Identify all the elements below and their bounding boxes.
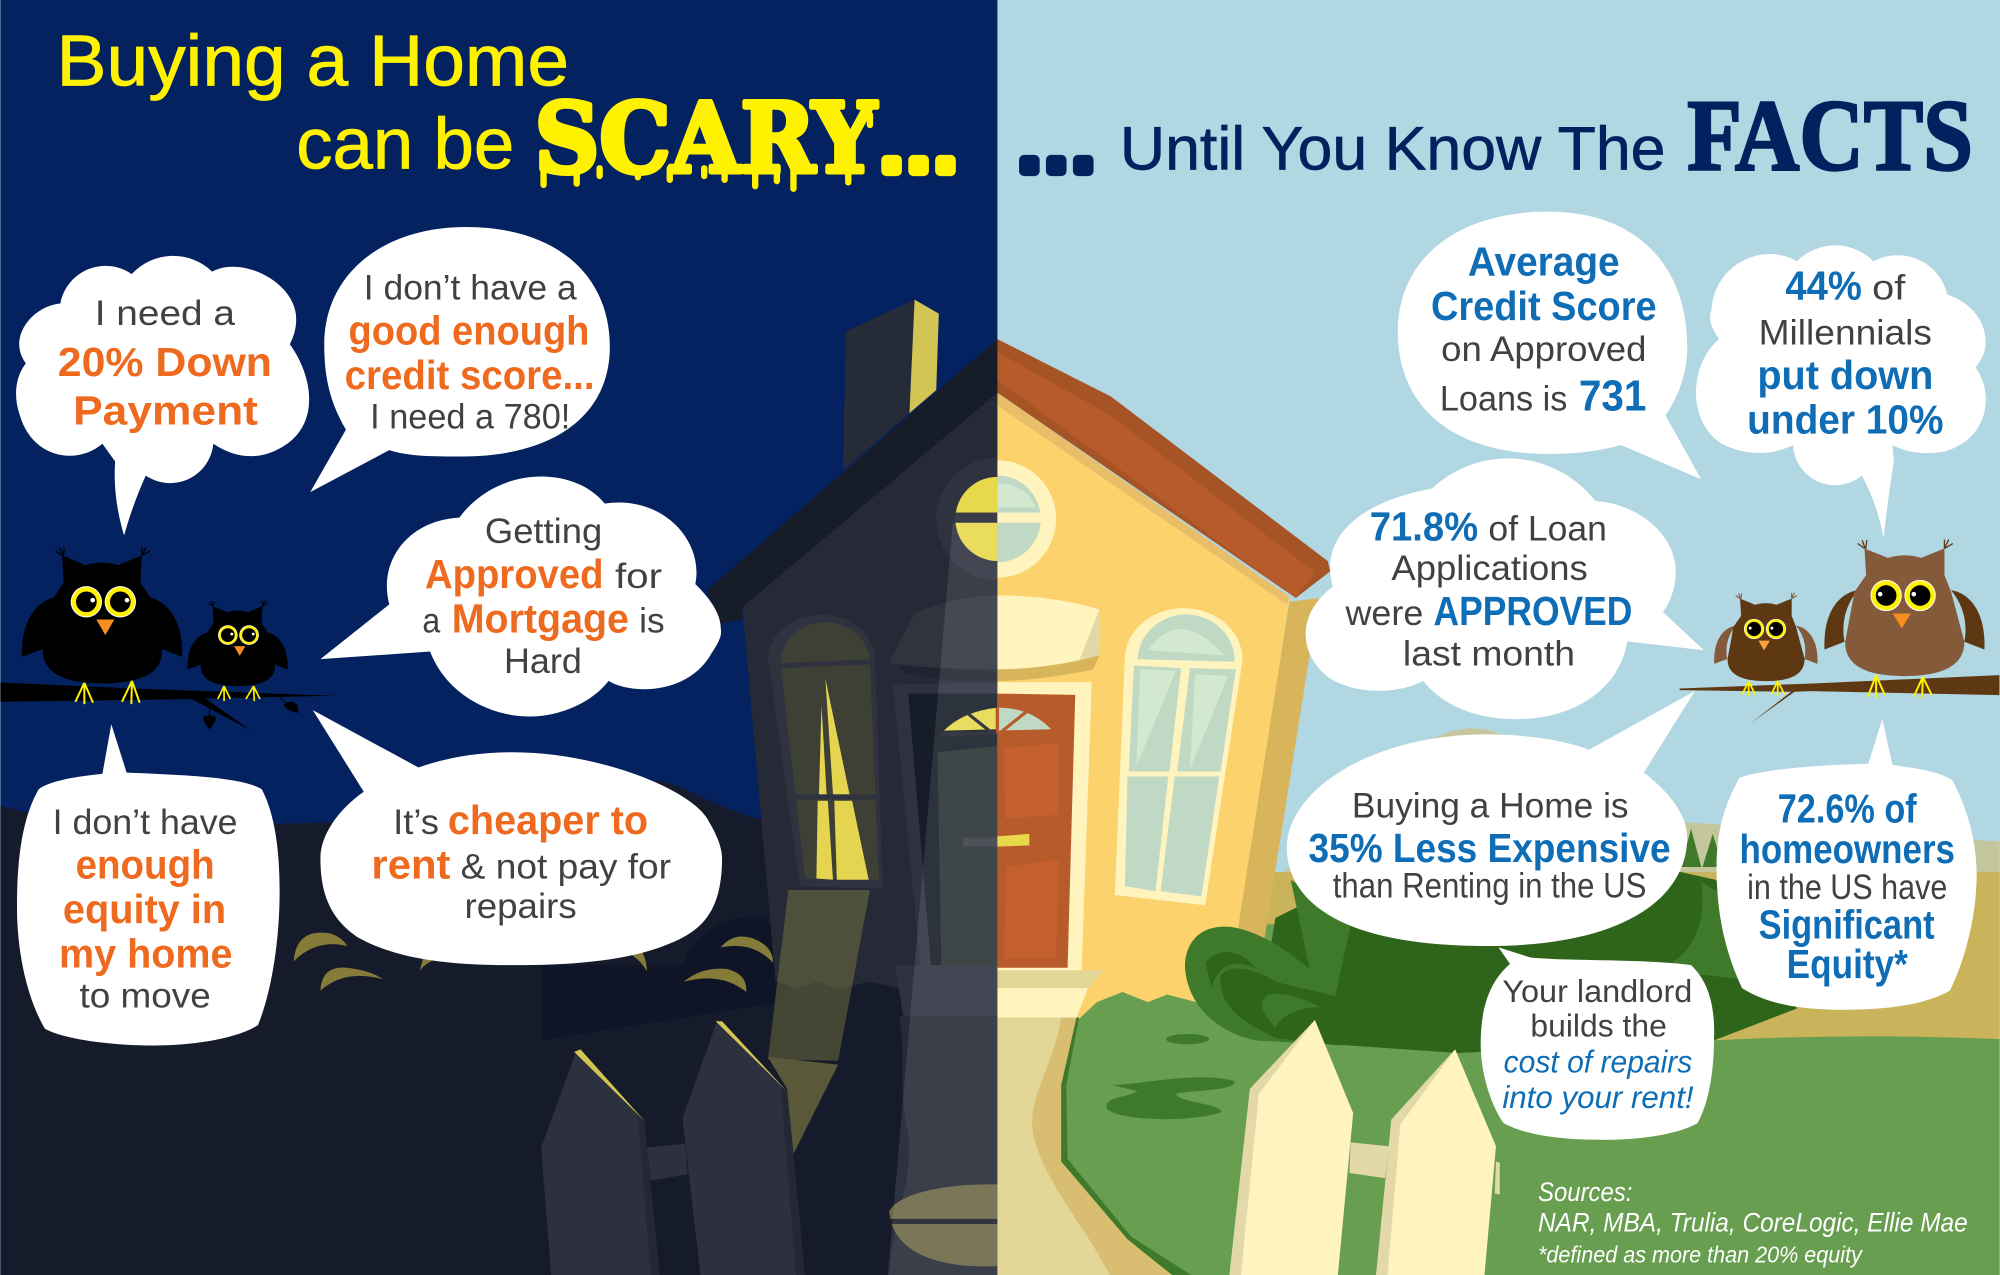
awning dark	[889, 595, 997, 682]
small black owl	[188, 601, 288, 701]
text: 731	[1579, 373, 1646, 421]
text: I don’t have a	[364, 269, 577, 308]
text	[53, 803, 238, 1015]
text: on Approved	[1441, 330, 1646, 369]
bubble: credit score	[310, 227, 610, 492]
bubble: cheaper to rent	[313, 710, 722, 965]
title right: Until You Know The	[1120, 115, 1666, 183]
text	[1345, 504, 1632, 674]
small brown owl	[1714, 593, 1818, 696]
text: of Loan	[1488, 510, 1607, 549]
bubble: landlord repairs	[1481, 947, 1714, 1140]
awning	[997, 595, 1099, 681]
text: homeowners	[1740, 826, 1955, 872]
text: 20% Down	[58, 339, 272, 385]
text: Mortgage	[452, 595, 629, 641]
bubble: less expensive	[1287, 691, 1695, 946]
door step	[997, 970, 1105, 1017]
bubble: 44% of millennials	[1696, 245, 1986, 538]
sources: Sources:	[1538, 1177, 1632, 1207]
title left: Buying a Home	[57, 20, 569, 101]
text	[1309, 786, 1671, 906]
title right: ...	[1019, 104, 1100, 187]
text: a	[422, 601, 441, 640]
big black owl	[22, 547, 182, 704]
title left	[56, 20, 962, 195]
night ground	[0, 780, 997, 1275]
big brown owl	[1824, 540, 1985, 698]
roof	[997, 339, 1330, 604]
text: Millennials	[1759, 313, 1932, 352]
panel: night sky left half	[0, 0, 997, 1275]
side wall	[1235, 598, 1319, 950]
text: It’s	[393, 803, 439, 842]
green bushes	[1107, 867, 1797, 1119]
text: for	[615, 557, 662, 596]
text: put down	[1757, 352, 1933, 398]
text	[1431, 238, 1657, 421]
panel: day sky right half	[997, 0, 2000, 1275]
window light beam	[768, 890, 870, 1154]
text: credit score...	[345, 352, 595, 398]
door dark	[893, 682, 997, 972]
text: good enough	[348, 307, 589, 353]
branch	[0, 682, 335, 730]
dark path and steps	[889, 965, 997, 1275]
text: Your landlord	[1502, 973, 1692, 1009]
text: Significant	[1759, 901, 1935, 947]
text	[345, 269, 595, 436]
text: than Renting in the US	[1333, 867, 1646, 906]
sources: NAR, MBA, Trulia, CoreLogic, Ellie Mae	[1538, 1208, 1968, 1238]
text: enough	[76, 841, 215, 887]
bubble: loan applications approved	[1306, 458, 1704, 719]
text: of	[1872, 269, 1906, 308]
text	[422, 512, 665, 681]
round attic window dark	[936, 458, 997, 580]
brown branch	[1680, 675, 1999, 723]
text: Approved	[425, 551, 603, 597]
black owls on branch	[0, 547, 335, 730]
title left: can be	[296, 103, 514, 184]
text: equity in	[63, 886, 226, 932]
text: Average	[1468, 238, 1620, 284]
text: my home	[59, 931, 232, 977]
text: builds the	[1530, 1008, 1667, 1044]
SCARY dripping word: SCARY	[535, 81, 878, 195]
text: I need a 780!	[370, 397, 570, 436]
text: in the US have	[1747, 868, 1947, 907]
text: Equity*	[1787, 941, 1908, 987]
sunny house right half	[997, 339, 1330, 1020]
text	[58, 294, 272, 434]
text: cheaper to	[448, 797, 648, 843]
bubble: approved for a mortgage	[320, 476, 721, 717]
text: to move	[79, 976, 211, 1015]
text: rent	[371, 841, 451, 887]
text: repairs	[465, 887, 577, 926]
text	[371, 797, 671, 926]
text: last month	[1403, 635, 1575, 674]
text: Credit Score	[1431, 283, 1657, 329]
text: Hard	[504, 642, 582, 681]
bubble: homeowners equity	[1717, 719, 1977, 1010]
text: I don’t have	[53, 803, 238, 842]
brown owls on branch	[1680, 540, 1999, 723]
text: cost of repairs	[1504, 1043, 1692, 1079]
arched window dark	[768, 615, 883, 889]
text	[1747, 263, 1944, 443]
sources: *defined as more than 20% equity	[1538, 1241, 1863, 1267]
bubble: 20% down payment	[16, 256, 309, 535]
text: APPROVED	[1434, 588, 1632, 634]
text: 35% Less Expensive	[1309, 825, 1671, 871]
text: were	[1345, 594, 1423, 633]
text: into your rent!	[1502, 1079, 1694, 1115]
text	[1740, 785, 1955, 987]
arched window	[1115, 608, 1242, 905]
walkway	[997, 1017, 1191, 1275]
dark roof	[707, 339, 997, 623]
bubble: enough equity	[17, 724, 280, 1046]
door and frame	[997, 682, 1092, 972]
text: Applications	[1391, 549, 1588, 588]
title left: ...	[881, 104, 962, 187]
text: Getting	[485, 512, 602, 551]
text: 44%	[1785, 263, 1862, 309]
text: I need a	[95, 294, 236, 333]
crescent eyes in the dark	[294, 933, 773, 992]
text: & not pay for	[461, 847, 671, 886]
day landscape	[997, 728, 2000, 1275]
cream picket fence	[1230, 1020, 1500, 1275]
text: Loans is	[1440, 380, 1567, 419]
text: Buying a Home is	[1352, 786, 1629, 825]
text: Payment	[73, 388, 258, 434]
text	[1502, 973, 1694, 1115]
bubble: average credit score	[1398, 212, 1701, 479]
sources	[1538, 1177, 1968, 1267]
text: under 10%	[1747, 397, 1943, 443]
title right	[1019, 80, 1973, 193]
chimney	[843, 300, 939, 470]
attic light beam	[888, 523, 997, 1275]
yellow wall	[997, 398, 1289, 1020]
haunted house left half	[707, 300, 997, 1275]
dark house wall	[742, 393, 997, 989]
text: is	[639, 601, 665, 640]
text: 72.6% of	[1778, 785, 1917, 831]
text: 71.8%	[1370, 504, 1478, 550]
round attic window	[997, 460, 1056, 578]
dark picket fence	[541, 1021, 805, 1275]
